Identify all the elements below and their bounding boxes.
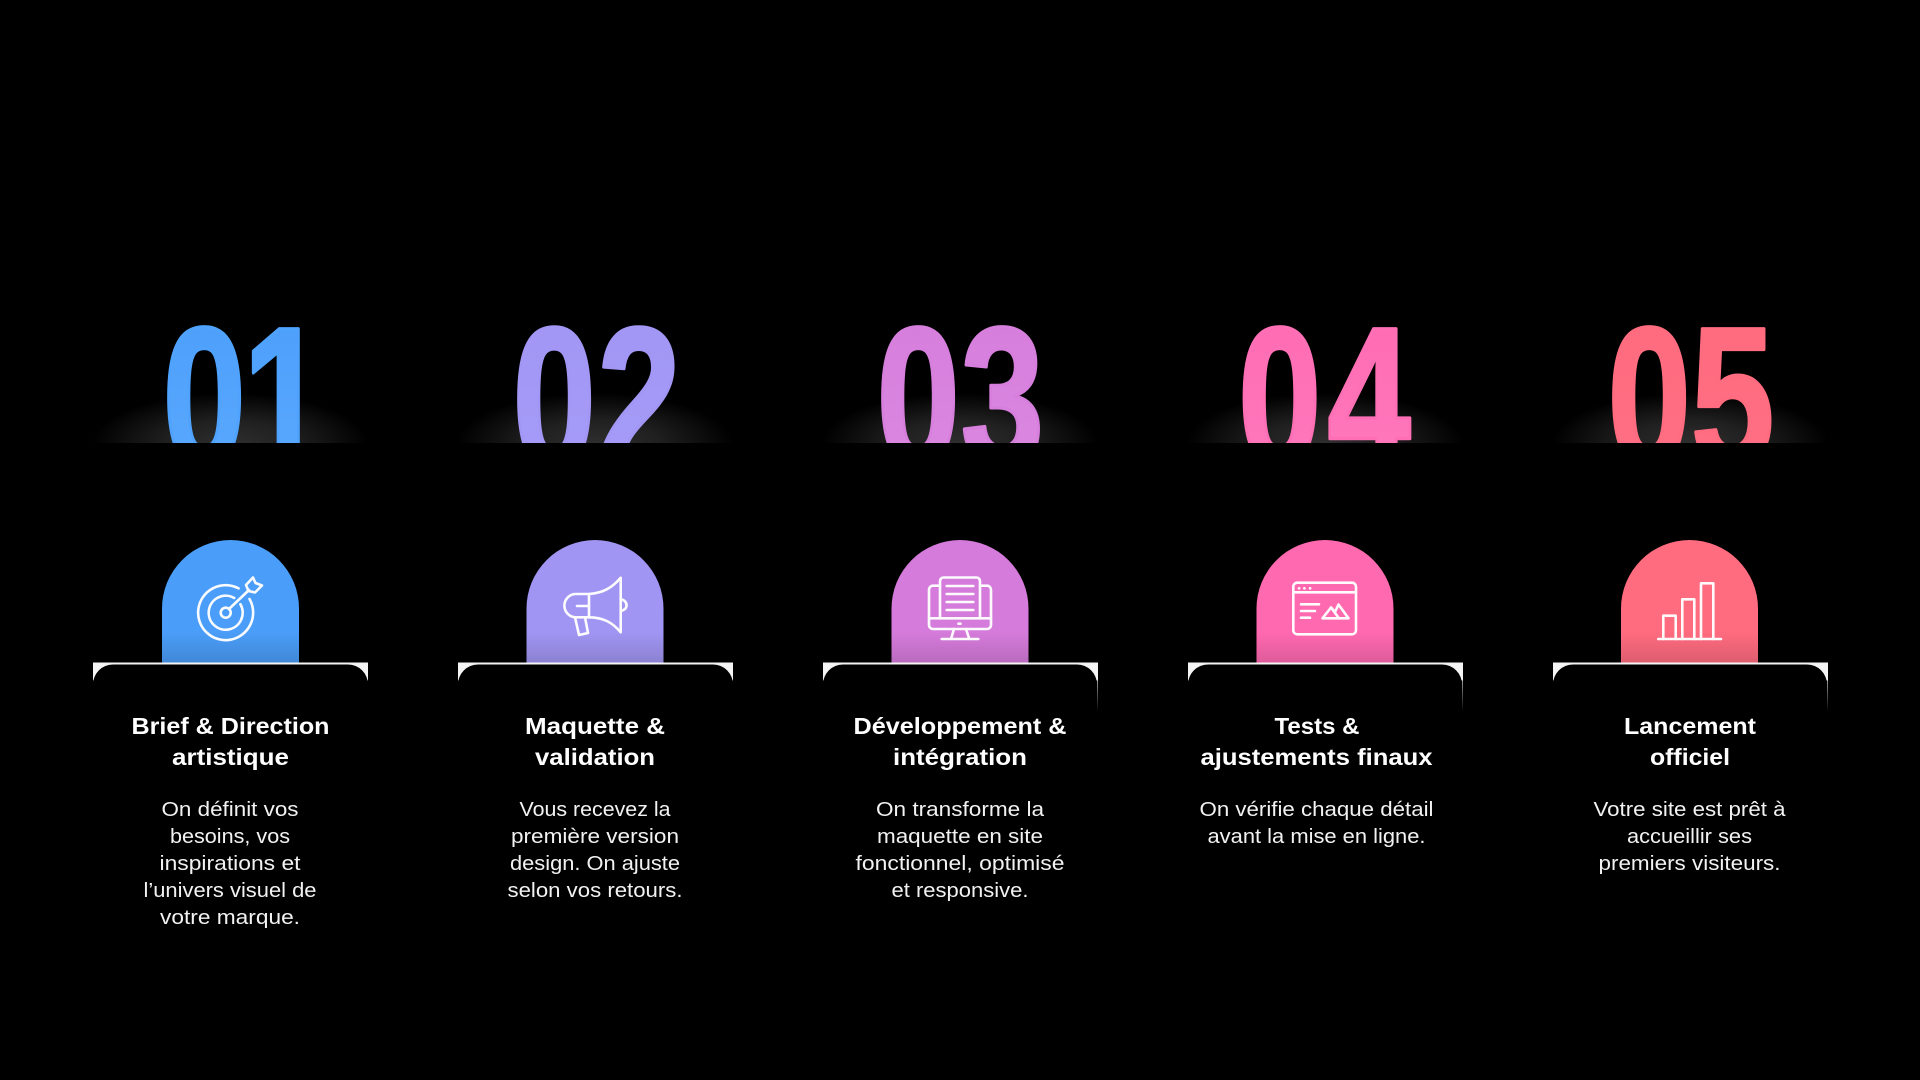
description: On vérifie chaque détail: [1200, 798, 1434, 821]
description: inspirations et: [160, 852, 301, 875]
heading: [132, 713, 330, 770]
description: besoins, vos: [170, 825, 290, 848]
description: Votre site est prêt à: [1594, 798, 1786, 821]
panel: step 3: [822, 287, 1098, 902]
number: 03: [840, 325, 1079, 443]
description: première version: [511, 825, 679, 848]
heading: [854, 713, 1067, 770]
card frame: [93, 662, 368, 724]
heading: [1200, 713, 1432, 770]
heading: Développement &: [854, 713, 1067, 739]
heading: [1624, 713, 1756, 770]
card frame: [458, 662, 733, 724]
card frame: [823, 662, 1098, 724]
heading: [525, 713, 665, 770]
description: fonctionnel, optimisé: [856, 852, 1064, 875]
description: On transforme la: [876, 798, 1045, 821]
icon tab: megaphone: [526, 540, 664, 662]
heading: artistique: [172, 744, 289, 770]
card frame: [1188, 662, 1463, 724]
panel: step 5: [1552, 287, 1828, 875]
number: 02: [476, 325, 714, 443]
number: 01: 01: [162, 287, 323, 509]
number: 05: 05: [1608, 287, 1774, 509]
description: maquette en site: [877, 825, 1043, 848]
heading: Lancement: [1624, 713, 1756, 739]
description: avant la mise en ligne.: [1208, 825, 1426, 848]
heading: officiel: [1650, 744, 1730, 770]
heading: validation: [535, 744, 655, 770]
heading: intégration: [893, 744, 1027, 770]
number: 04: 04: [1238, 287, 1417, 509]
description: [144, 798, 316, 929]
panel: step 1: [92, 287, 368, 929]
icon tab: monitor: [892, 540, 1028, 662]
heading: Tests &: [1274, 713, 1360, 739]
description: selon vos retours.: [508, 879, 682, 902]
description: premiers visiteurs.: [1598, 852, 1780, 875]
description: Vous recevez la: [520, 798, 671, 821]
description: [508, 798, 682, 902]
number: 04: [1206, 325, 1444, 443]
description: [1200, 798, 1434, 848]
number: 05: [1570, 325, 1809, 443]
description: et responsive.: [892, 879, 1028, 902]
icon tab: target: [162, 540, 299, 662]
panel: step 4: [1187, 287, 1463, 848]
description: l’univers visuel de: [144, 879, 316, 902]
description: accueillir ses: [1627, 825, 1752, 848]
icon tab: bar chart: [1621, 540, 1758, 662]
heading: Brief & Direction: [132, 713, 330, 739]
description: [1594, 798, 1786, 875]
panel: step 2: [457, 285, 733, 902]
description: On définit vos: [162, 798, 298, 821]
card frame: [1553, 662, 1828, 724]
description: design. On ajuste: [510, 852, 680, 875]
number: 01: [110, 325, 349, 443]
heading: ajustements finaux: [1200, 744, 1432, 770]
number: 03: 03: [876, 287, 1045, 509]
number: 02: 02: [512, 285, 682, 512]
heading: Maquette &: [525, 713, 665, 739]
icon tab: browser window: [1256, 540, 1394, 662]
description: votre marque.: [160, 906, 300, 929]
description: [856, 798, 1064, 902]
